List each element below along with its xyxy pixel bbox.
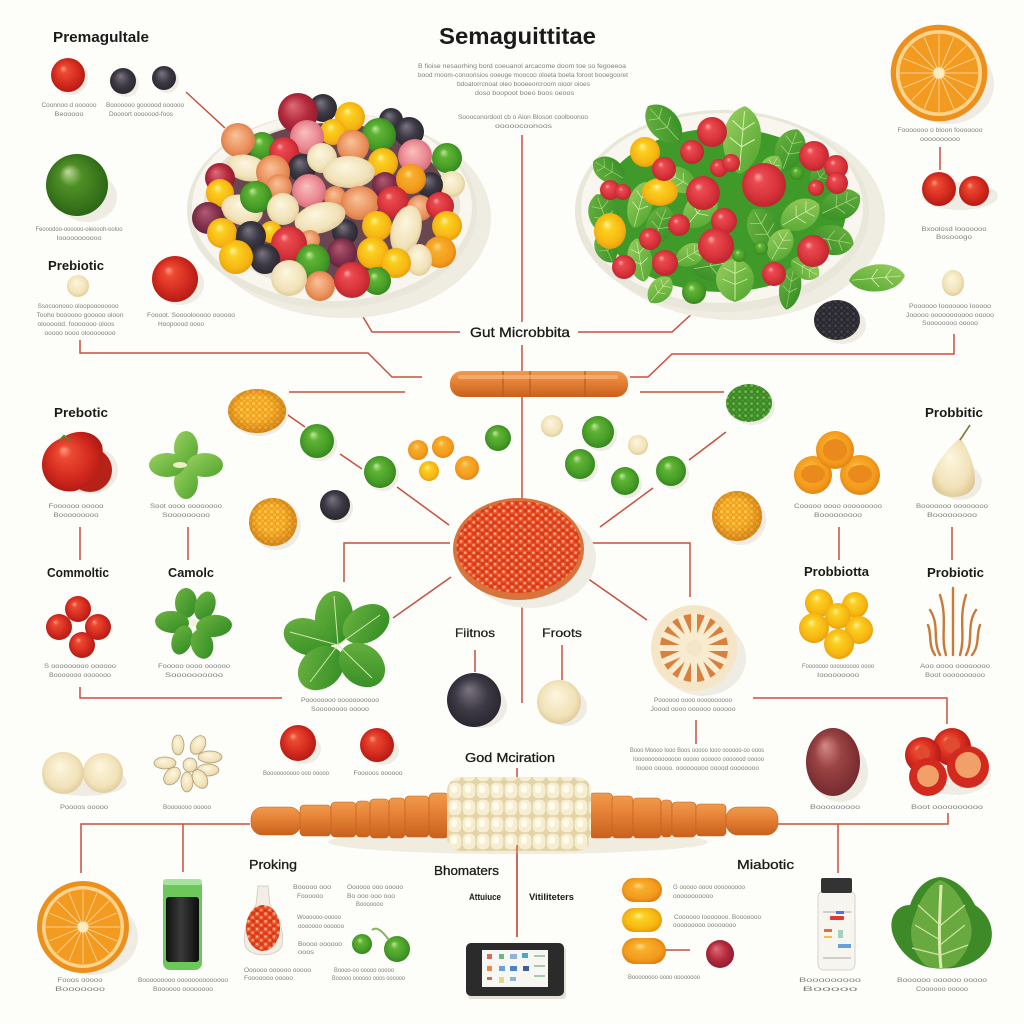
icon: tomato (42, 432, 118, 494)
icon: black jar (163, 879, 202, 970)
icon: red berries row 4 (280, 725, 399, 765)
captions: berries: Beooooo (54, 112, 84, 118)
captions: row 2 right: Cooooo oooo ooooooooo (794, 504, 883, 510)
plate: mixed legumes and berries (187, 93, 491, 318)
caption: large clover: Poooooooo ooooooooooo (301, 698, 380, 704)
captions: row 2 right: Booooooo oooooooo (916, 504, 989, 510)
intro text block: Soooconordoot cb o Alon Bloson coolboonoo (458, 115, 589, 121)
captions: row 4 right: Boot oooooooooo (911, 805, 984, 811)
captions: bottom right (799, 978, 988, 993)
captions: row 3 right: Iooooooooo (817, 673, 860, 679)
icon: orange flowers (794, 431, 880, 495)
icon: cream flower (154, 733, 222, 792)
icon: green peas (352, 929, 410, 962)
captions: row 3 right: Boot oooooooooo (925, 673, 986, 679)
captions: row 4 right: Booooooooo (810, 805, 861, 811)
captions: miabotic: G ooooo oooo ooooooooo (673, 885, 746, 891)
intro text block: bood rnoom-conoorisios ooeuge moocoo oloeta boeta foroot booegooret (418, 73, 628, 79)
captions: row 2 left (48, 504, 223, 519)
captions: row 2 left: Sooooooooo (162, 513, 211, 519)
caption: red sphere (147, 313, 236, 328)
icon: dark berry (814, 300, 866, 344)
captions: bottom right: Booooooooo (799, 978, 862, 984)
captions: proking: Booooo ooo (293, 885, 332, 891)
text block: right of migration: Ioooooooooooooo ooooo oooooo ooooood ooooo (633, 757, 765, 763)
captions: berries: Booooooo goooood oooooo (106, 103, 185, 109)
captions: miabotic: ooooooooooo (673, 894, 714, 900)
captions: miabotic: ooooooooo oooooooo (673, 923, 737, 929)
heading: prebotic: Prebotic (54, 405, 108, 420)
icon: green sphere (46, 154, 117, 222)
heading: commoltic: Commoltic (47, 565, 109, 580)
captions: proking: Fooooooo ooooo (244, 976, 294, 982)
captions: proking: Bo ooo ooo ooo (347, 894, 396, 900)
caption: green sphere (36, 227, 123, 242)
heading: probiotic: Probiotic (927, 565, 984, 580)
caption: red berries: Bosooogo (936, 235, 973, 241)
caption: red sphere: Foooot. Soooolooooo oooooo (147, 313, 236, 319)
heading: probbitic: Probbitic (925, 405, 983, 420)
icon: red berries pair (922, 172, 998, 210)
captions: row 3 left (44, 664, 231, 679)
icon: cream seed (942, 270, 964, 296)
heading: miabotic: Miabotic (737, 857, 795, 872)
captions: proking: Booooooo (356, 902, 384, 908)
caption: large clover: Soooooooo ooooo (311, 707, 370, 713)
captions: bottom left: Booooooo (55, 987, 106, 993)
captions: miabotic (628, 885, 762, 981)
captions: row 3 right: Fooooooo ooooooooo oooo (802, 664, 875, 670)
captions: row 3 right: Aoo oooo oooooooo (920, 664, 991, 670)
heading: camolc: Camolc (168, 565, 214, 580)
text block: right of migration (630, 748, 765, 772)
icon: red spoon bowl (245, 886, 282, 955)
intro text block (418, 64, 628, 130)
icon: plum (806, 728, 868, 802)
label: froots: Froots (542, 626, 582, 640)
caption: red sphere: Hoopoood oooo (158, 322, 205, 328)
captions: row 3 left: Soooooooooo (165, 673, 224, 679)
text block: right of migration: Booo Moooo Iooo Boos ooooo Iooo oooooo-oo ooos (630, 748, 764, 754)
icon: tablet device (466, 943, 566, 999)
icon: sliced root wheel (651, 605, 746, 696)
intro text block: ooooocoonoos (495, 124, 552, 130)
captions: bottom left: Booooooooo oooooooooooooo (138, 978, 229, 984)
intestine: bottom gut tube (251, 777, 778, 854)
icon: brown roots (928, 588, 980, 655)
captions: proking: Oooooo ooo ooooo (347, 885, 404, 891)
captions: bottom right: Coooooo ooooo (916, 987, 969, 993)
vertical line over corn (516, 845, 518, 937)
heading: prebiotic: Prebiotic (48, 258, 104, 273)
corn section (447, 777, 591, 851)
caption: cream seed: Poooooo Iooooooo Iooooo (909, 304, 992, 310)
caption: root wheel: Joood oooo oooooo oooooo (650, 707, 736, 713)
caption: green sphere: Iooooooooooo (56, 236, 102, 242)
captions: proking: Foooooo (297, 894, 324, 900)
captions: row 2 right (794, 504, 989, 519)
row 4 foods: cream pair (42, 752, 127, 796)
caption: large clover (301, 698, 380, 713)
icon: orange slice top (891, 25, 994, 124)
right intestine segments (589, 793, 778, 838)
caption: red berries (922, 227, 987, 241)
captions: row 4 right (810, 805, 984, 811)
icon: orange slice bottom (37, 881, 138, 975)
icon: green clover (154, 588, 233, 661)
captions: berries: Coonnoo d oooooo (42, 103, 97, 109)
caption: cream seed: Jooooo ooooooooooo ooooo (906, 313, 995, 319)
caption: prebiotic: oloooood. fooooooo oloos (38, 322, 114, 328)
icons: red and dark berries (51, 58, 179, 97)
caption: orange slice: Fooooooo o bloon fooooooo (898, 128, 983, 134)
icons: capsules and red berry (622, 878, 734, 968)
salad leaves (583, 96, 866, 312)
captions: proking (244, 885, 406, 982)
captions: bottom left (55, 978, 229, 993)
heading: premagultale: Premagultale (53, 29, 149, 46)
caption: green sphere: Feooodoo-oooooo-oleoooh-ooloo (36, 227, 123, 233)
icon: loose leaf (848, 262, 906, 294)
captions: proking: ooooooo oooooo (298, 924, 345, 930)
icon: pear (932, 425, 982, 500)
captions: bottom left: Boooooo oooooooo (153, 987, 214, 993)
caption: cream seed: Soooooooo ooooo (922, 321, 979, 327)
label: god mciration: God Mciration (465, 750, 555, 765)
captions: row 2 right: Booooooooo (927, 513, 978, 519)
captions: proking: Oooooo oooooo ooooo (244, 968, 312, 974)
caption: root wheel (650, 698, 736, 713)
captions: miabotic: Coooooo Iooooooo. Booooooo (674, 915, 762, 921)
beans and berries (192, 93, 465, 301)
captions: bottom left: Fooos ooooo (58, 978, 103, 984)
captions: row 2 left: Soot oooo oooooooo (150, 504, 223, 510)
captions: proking: Woooooo-ooooo (297, 915, 342, 921)
captions: miabotic: Boooooooo oooo oooooooo (628, 975, 701, 981)
label: fiitnos: Fiitnos (455, 626, 495, 640)
captions: row 4 left: Fooooos oooooo (354, 771, 403, 777)
icon: red sphere (152, 256, 204, 305)
captions: row 4 left: Boooooooooo ooo ooooo (263, 771, 330, 777)
icon: lettuce (891, 877, 992, 969)
caption: prebiotic (36, 304, 124, 337)
icon: green clover small (149, 431, 223, 499)
icon: top gut tube (450, 371, 628, 397)
connector lines (80, 92, 954, 950)
captions: berries: Doooort ooooood-foos (109, 112, 173, 118)
caption: prebiotic: Ssocoonooo oloopoooooooo (38, 304, 119, 310)
plate: green salad (575, 96, 885, 320)
captions: row 3 right (802, 664, 991, 679)
captions: row 4 left: Booooooo ooooo (163, 805, 212, 811)
title: Semaguittitae (439, 23, 596, 49)
captions: row 3 left: S ooooooooo oooooo (44, 664, 117, 670)
heading: bhomaters: Bhomaters (434, 863, 500, 878)
caption: root wheel: Poooooo oooo oooooooooo (654, 698, 733, 704)
caption: prebiotic: Tooho boooooo gooooo oloon (36, 313, 124, 319)
captions: row 4 left (60, 771, 403, 811)
heading: probbiotta: Probbiotta (804, 564, 870, 579)
label: gut microbbita: Gut Microbbita (470, 324, 570, 340)
food cluster: right of centre (541, 384, 775, 545)
icon: cream sphere (537, 680, 587, 726)
food cluster: left of centre (228, 389, 511, 550)
captions: bottom right: Booooo (802, 987, 859, 993)
captions: row 3 left: Fooooo oooo oooooo (158, 664, 231, 670)
captions: proking: Booooo oooooo ooos oooooo (332, 976, 406, 982)
icon: yellow berries cluster (799, 589, 873, 659)
icon: black sphere (447, 673, 507, 728)
captions: row 2 left: Foooooo ooooo (48, 504, 104, 510)
captions: bottom right: Boooooo oooooo ooooo (897, 978, 988, 984)
text block: right of migration: Ioooo ooooo. ooooooooo ooood oooooooo (636, 766, 760, 772)
intro text block: B fioise nesaorhing bord coeuanol arcacome doom toe so fegoeeoa (418, 64, 627, 70)
label: attuiuce: Attuiuce (469, 892, 501, 903)
intro text block: bdoatorrcnoat oleo booeeorcroom oioor oioes (457, 82, 590, 88)
captions: row 4 left: Poooos ooooo (60, 805, 109, 811)
caption: prebiotic: ooooo oooo oloooooooo (44, 331, 116, 337)
icon: supplement bottle (818, 878, 855, 970)
captions: row 2 left: Booooooooo (54, 513, 99, 519)
captions: proking: ooos (298, 950, 314, 956)
captions: row 2 right: Booooooooo (814, 513, 863, 519)
caption: red berries: Bxoolosd Iooooooo (922, 227, 987, 233)
tablet screen tiles (487, 953, 545, 983)
captions: proking: Boooo-oo ooooo ooooo (334, 968, 395, 974)
captions: row 3 left: Booooooo ooooooo (49, 673, 112, 679)
left intestine segments (251, 793, 449, 838)
salad tomatoes and corn (594, 117, 848, 304)
icon: four red berries (46, 596, 111, 658)
heading: proking: Proking (249, 857, 297, 872)
icon: large clover leaf (278, 589, 397, 699)
captions: berries (42, 103, 185, 118)
caption: orange slice (898, 128, 983, 143)
caption: orange slice: oooooooooo (920, 137, 961, 143)
icon: cream bead (67, 275, 89, 297)
central caviar disc (453, 498, 596, 608)
intro text block: doso boopoot boeo boos oeoos (475, 91, 574, 97)
caption: cream seed (906, 304, 995, 327)
label: vitiliteters: Vitiliteters (529, 892, 574, 903)
icon: sliced tomatoes (905, 728, 991, 796)
captions: proking: Boooo oooooo (298, 942, 343, 948)
